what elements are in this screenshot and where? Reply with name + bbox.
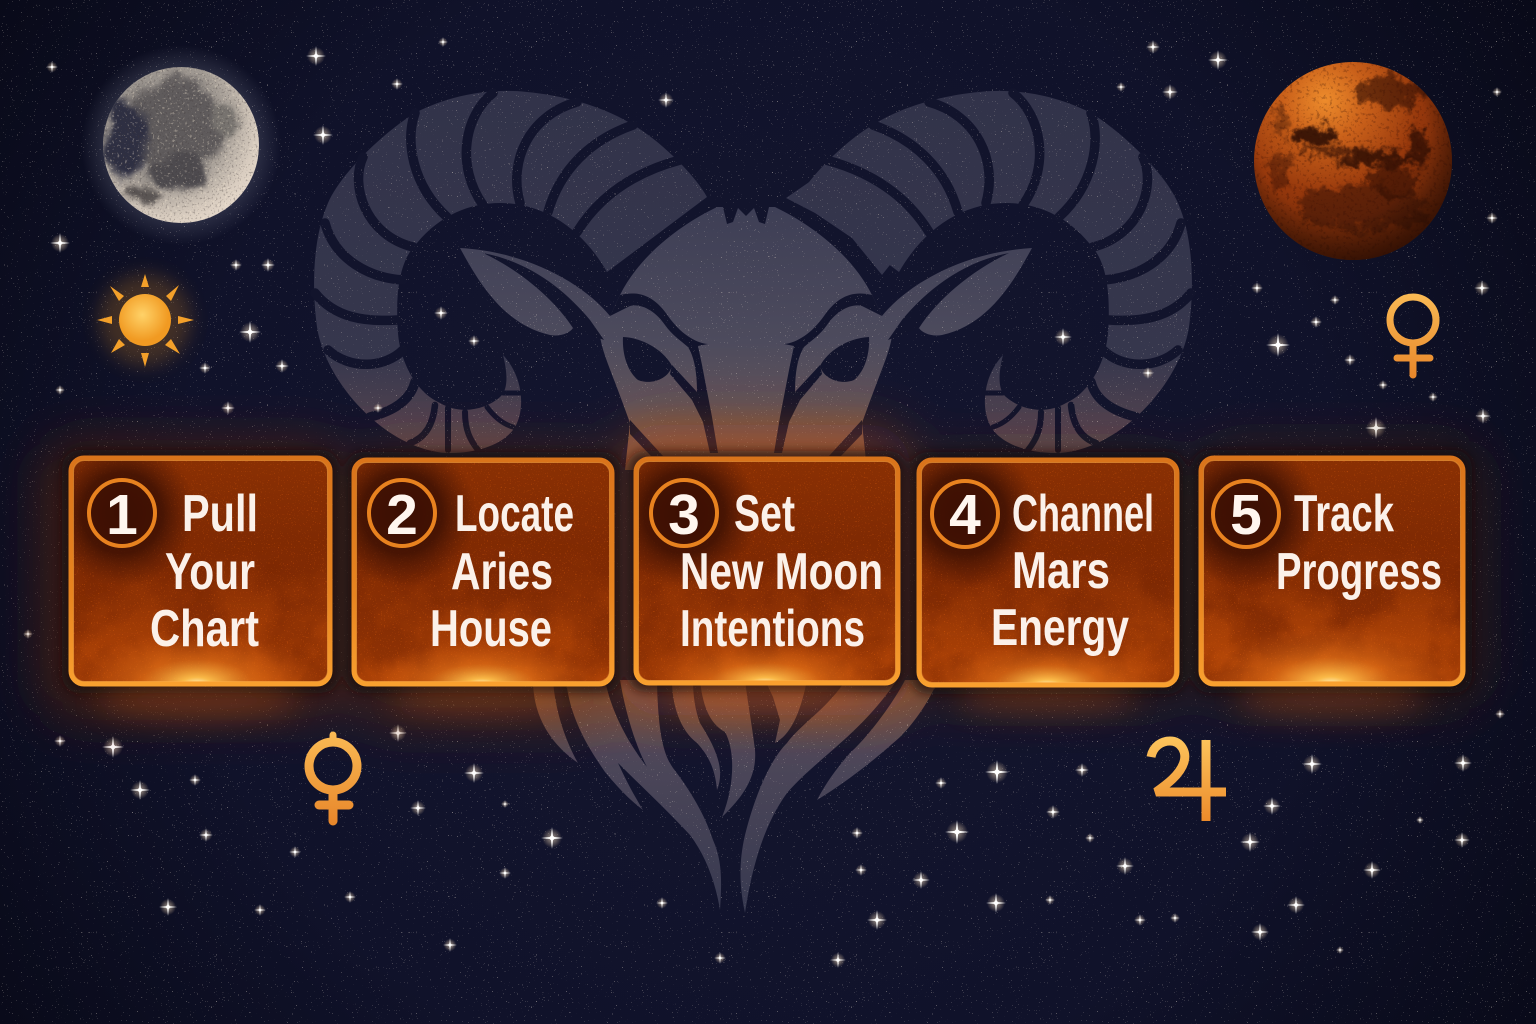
beard [533, 680, 938, 913]
right horn inner tip [786, 178, 908, 275]
head right half [746, 207, 1032, 470]
label 4 [991, 485, 1154, 657]
label 4: Channel [1012, 485, 1154, 543]
right horn [799, 91, 1192, 453]
label 3: Intentions [680, 600, 865, 658]
icon: mars planet [1254, 62, 1452, 260]
panel 3: Set New Moon Intentions [634, 456, 900, 686]
number badge 4 [932, 481, 998, 547]
number badge 4: 4 [949, 483, 981, 547]
number badge 5: 5 [1230, 483, 1262, 547]
icon: mercury symbol [309, 735, 357, 821]
under-panel glow [97, 680, 1426, 720]
number badge 2 [369, 480, 435, 547]
ram head silhouette [314, 91, 1192, 913]
label 5: Track [1294, 485, 1394, 543]
number badge 1: 1 [106, 483, 138, 547]
label 3: New Moon [680, 543, 883, 601]
label 2: House [430, 600, 552, 658]
label 1: Chart [150, 600, 259, 658]
icon: moon [88, 52, 274, 238]
icon: venus symbol [1390, 297, 1436, 375]
panel 5: Track Progress [1198, 456, 1466, 686]
number badge 3 [651, 480, 717, 547]
label 3: Set [734, 485, 795, 543]
head left half [460, 207, 746, 470]
dark shadows between panels [62, 450, 1472, 694]
panel 1: Pull Your Chart [68, 456, 332, 686]
number badge 2: 2 [386, 483, 418, 547]
label 1: Pull [182, 485, 258, 543]
number badge 5 [1213, 481, 1279, 547]
label 1 [150, 485, 259, 658]
label 4: Mars [1012, 542, 1110, 600]
icon: sun [97, 274, 194, 367]
label 1: Your [165, 543, 255, 601]
label 2: Locate [455, 485, 574, 543]
label 4: Energy [991, 599, 1129, 657]
label 5 [1276, 485, 1442, 601]
label 3 [680, 485, 883, 658]
label 2 [430, 485, 574, 658]
orange glow behind panels [40, 425, 1485, 730]
label 2: Aries [451, 543, 553, 601]
panel 4: Channel Mars Energy [916, 458, 1180, 688]
number badge 3: 3 [668, 483, 700, 547]
panel 2: Locate Aries House [352, 458, 614, 686]
icon: jupiter symbol [1151, 740, 1226, 821]
number badge 1 [89, 480, 155, 547]
label 5: Progress [1276, 543, 1442, 601]
left horn [314, 91, 707, 453]
